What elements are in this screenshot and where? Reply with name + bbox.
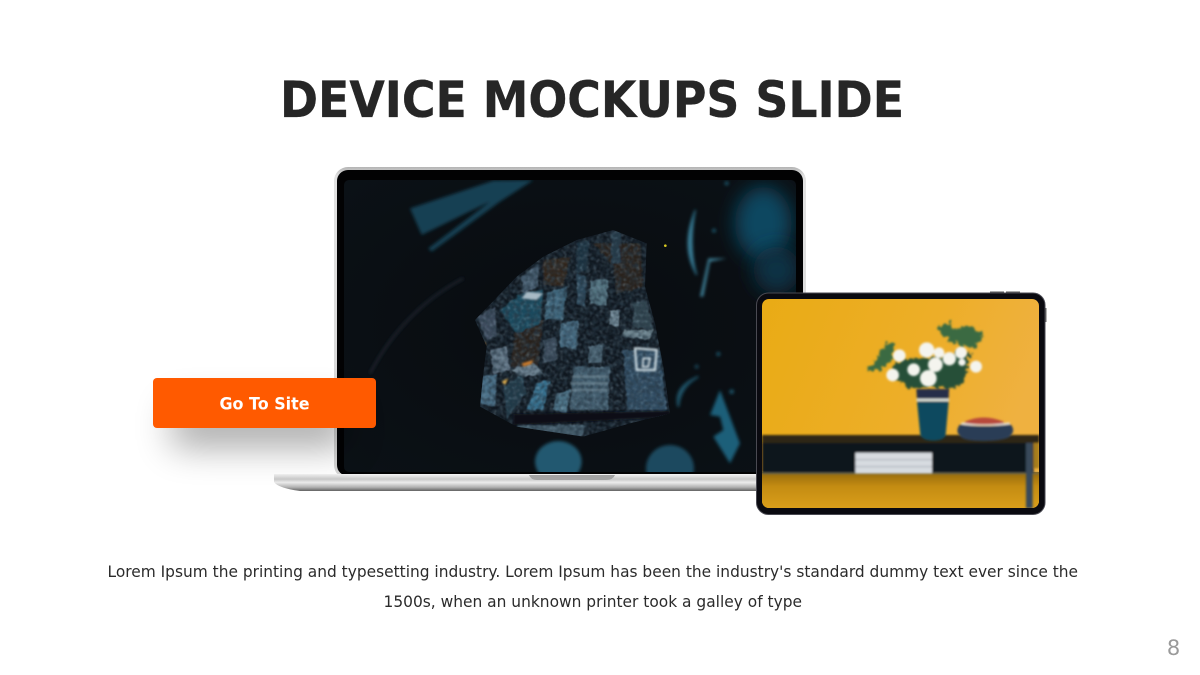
laptop mockup — [274, 167, 806, 491]
tablet screen: yellow wall with vase — [762, 299, 1039, 508]
yellow light dot — [664, 244, 667, 247]
flowers — [886, 342, 982, 387]
page number: 8 — [1167, 636, 1180, 660]
laptop lid frame — [334, 167, 806, 479]
bowl — [957, 417, 1013, 441]
button: Go To Site — [153, 378, 376, 428]
laptop screen: aerial city photo — [344, 174, 800, 492]
body text — [108, 562, 1078, 611]
button: Go To Site: Go To Site — [220, 394, 310, 414]
body text: 1500s, when an unknown printer took a galley of type — [384, 592, 802, 611]
tablet mockup — [756, 292, 1046, 514]
title: DEVICE MOCKUPS SLIDE — [280, 71, 904, 129]
city cut-out — [470, 227, 677, 440]
laptop base — [274, 474, 870, 491]
console table — [762, 435, 1039, 508]
foliage — [867, 321, 983, 388]
building texture — [476, 231, 668, 436]
body text: Lorem Ipsum the printing and typesetting industry. Lorem Ipsum has been the industry's standard dummy text ever since the — [108, 562, 1078, 581]
tablet side buttons — [990, 292, 1046, 322]
webcam — [568, 174, 572, 178]
tablet frame — [756, 293, 1045, 514]
button shadow — [172, 405, 348, 447]
vase — [916, 389, 949, 441]
